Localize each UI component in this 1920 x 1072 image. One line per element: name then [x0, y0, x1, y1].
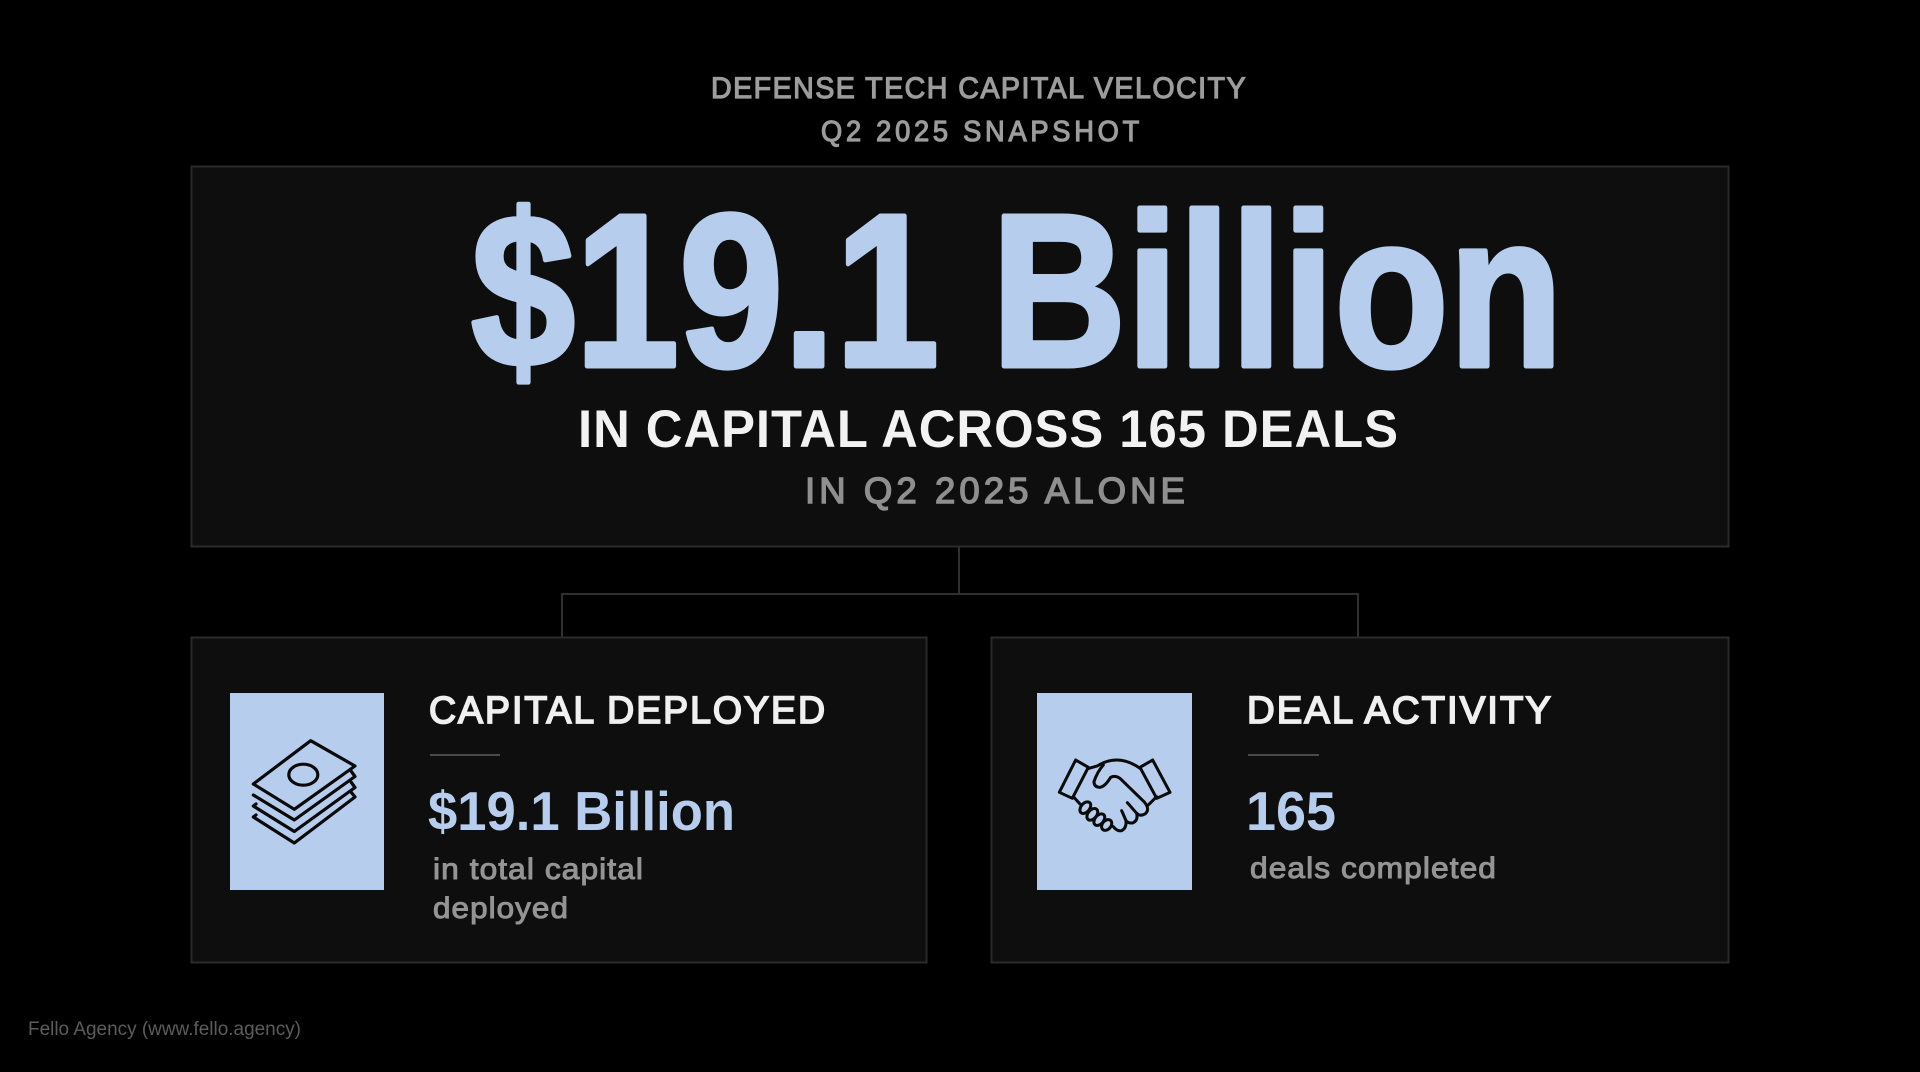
card description: deals completed — [1250, 852, 1497, 885]
card heading: CAPITAL DEPLOYED — [429, 690, 827, 732]
headline note: IN Q2 2025 ALONE — [805, 470, 1189, 511]
card description: in total capital — [433, 853, 644, 886]
panel: deal activity — [992, 638, 1728, 962]
panel: headline — [192, 166, 1728, 546]
headline subtitle: IN CAPITAL ACROSS 165 DEALS — [578, 400, 1399, 459]
title: Q2 2025 SNAPSHOT — [821, 116, 1143, 148]
card heading: DEAL ACTIVITY — [1247, 690, 1553, 732]
footer credit: Fello Agency (www.fello.agency) — [28, 1019, 301, 1040]
connector lines — [562, 546, 1358, 637]
panel: capital deployed — [192, 638, 926, 962]
headline figure: $19.1 Billion — [471, 170, 1563, 413]
title — [711, 72, 1247, 148]
icon: handshake — [1037, 693, 1192, 890]
card description — [433, 853, 644, 925]
title: DEFENSE TECH CAPITAL VELOCITY — [711, 72, 1247, 105]
icon: stack of banknotes — [230, 693, 384, 890]
card figure: $19.1 Billion — [428, 780, 735, 842]
card figure: 165 — [1246, 780, 1336, 842]
card description: deployed — [433, 892, 569, 925]
